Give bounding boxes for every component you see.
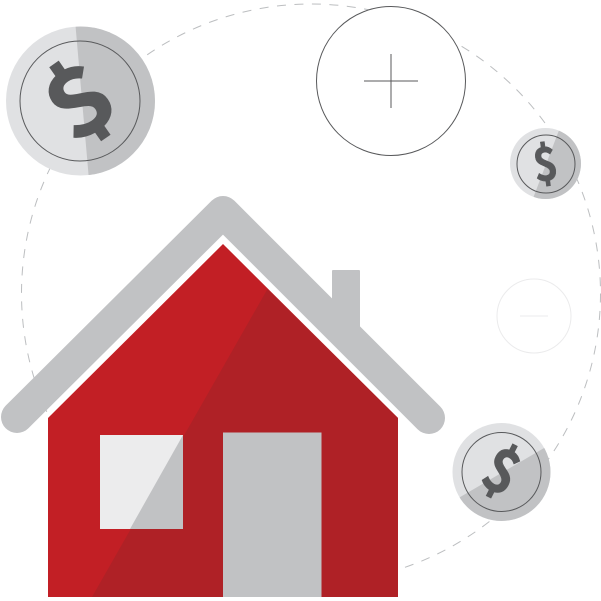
- roof: [17, 212, 429, 418]
- icon: small dollar coin: $: [528, 126, 562, 196]
- icon: large dollar coin: $: [13, 24, 139, 168]
- icon: medium dollar coin: $: [470, 422, 537, 513]
- window: [100, 435, 183, 529]
- door: [223, 432, 322, 597]
- icon: minus circle: [497, 279, 571, 353]
- icon: medium dollar coin: [452, 423, 550, 521]
- icon: small dollar coin: [510, 128, 581, 199]
- chimney: [332, 270, 360, 340]
- house illustration: [17, 212, 429, 597]
- icon: plus circle: [316, 6, 466, 156]
- house wall: [48, 244, 398, 597]
- wall shadow: [92, 289, 398, 597]
